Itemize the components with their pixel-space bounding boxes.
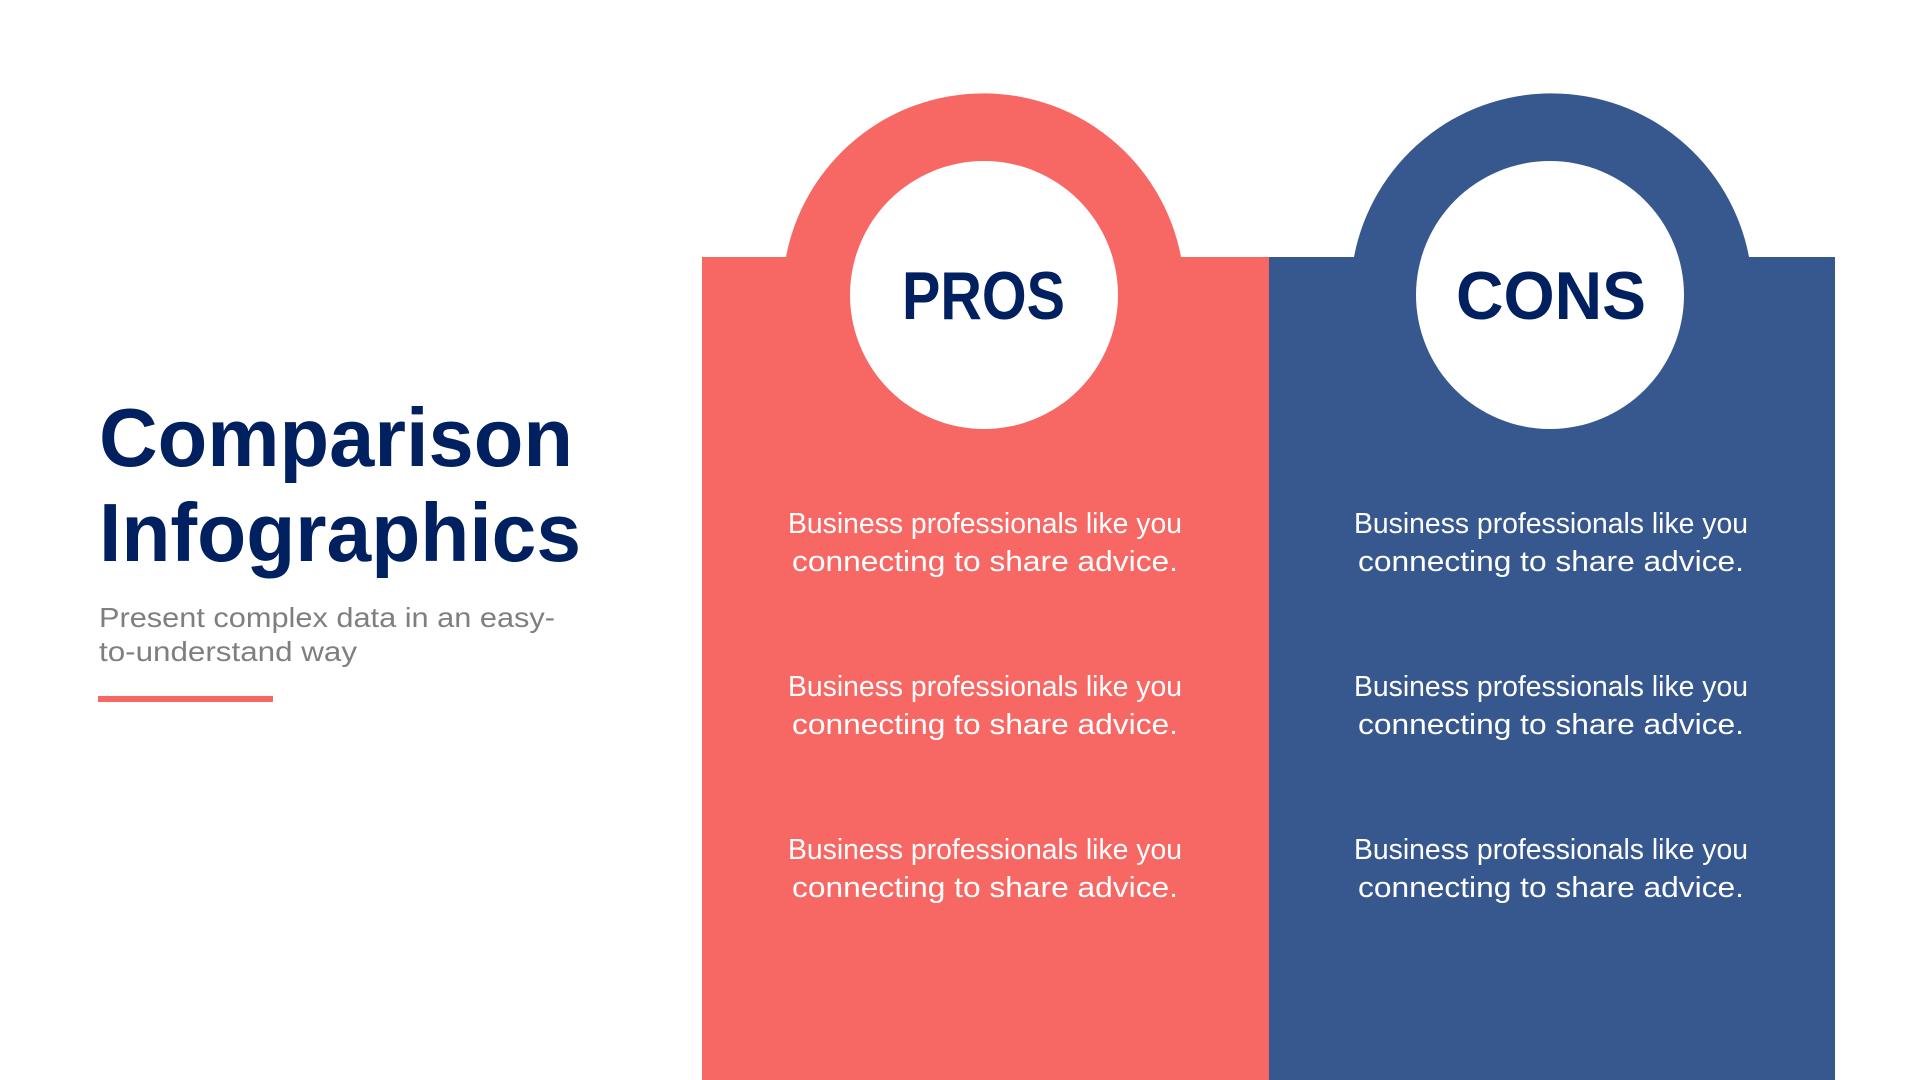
subtitle	[99, 602, 555, 667]
cons item 2: Business professionals like you	[1354, 671, 1748, 703]
pros badge	[850, 161, 1118, 429]
pros item 1: Business professionals like you	[788, 508, 1182, 540]
cons item 3	[1354, 834, 1748, 904]
title: Infographics	[99, 486, 581, 579]
cons panel background with arch	[1269, 93, 1835, 1080]
cons item 2: connecting to share advice.	[1358, 709, 1744, 741]
pros item 3	[788, 834, 1182, 904]
cons badge	[1416, 161, 1684, 429]
title: Comparison	[99, 391, 573, 484]
title	[99, 391, 581, 579]
pros item 1	[788, 508, 1182, 578]
subtitle: to-understand way	[99, 636, 357, 667]
subtitle: Present complex data in an easy-	[99, 602, 555, 633]
accent rule	[98, 696, 273, 702]
pros item 2	[788, 671, 1182, 741]
cons item 3: Business professionals like you	[1354, 834, 1748, 866]
cons item 1: Business professionals like you	[1354, 508, 1748, 540]
cons item 1	[1354, 508, 1748, 578]
pros item 2: connecting to share advice.	[792, 709, 1178, 741]
pros panel background with arch	[702, 93, 1269, 1080]
cons item 3: connecting to share advice.	[1358, 872, 1744, 904]
cons badge: CONS	[1456, 258, 1646, 334]
pros item 3: Business professionals like you	[788, 834, 1182, 866]
cons item 1: connecting to share advice.	[1358, 546, 1744, 578]
panel: pros	[702, 93, 1269, 1080]
pros item 3: connecting to share advice.	[792, 872, 1178, 904]
pros badge: PROS	[902, 258, 1065, 334]
panel: cons	[1269, 93, 1835, 1080]
pros item 2: Business professionals like you	[788, 671, 1182, 703]
title block	[98, 391, 581, 702]
cons item 2	[1354, 671, 1748, 741]
pros item 1: connecting to share advice.	[792, 546, 1178, 578]
